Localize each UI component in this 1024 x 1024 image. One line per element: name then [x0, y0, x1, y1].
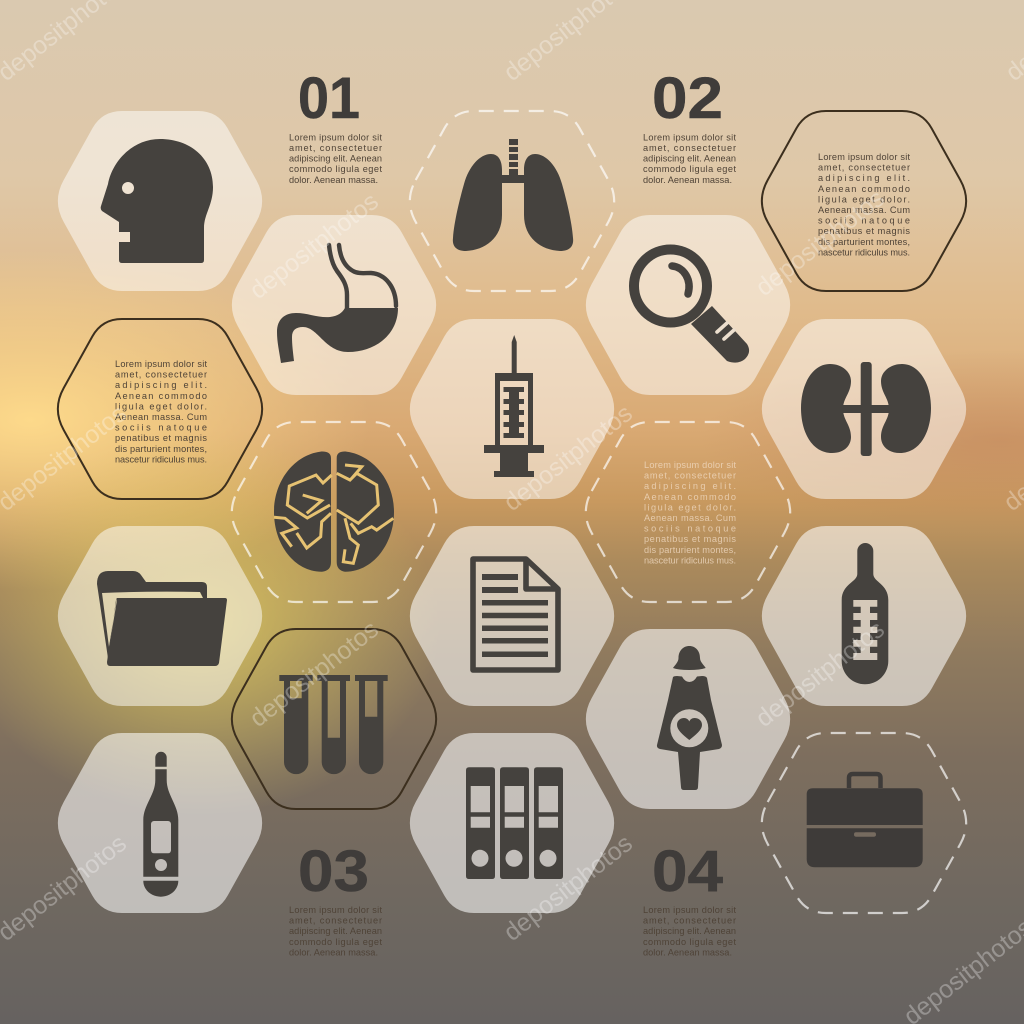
- dashed hexagon: text block: adipiscing elit.: [644, 481, 736, 491]
- section 02: number and text: amet, consectetuer: [643, 143, 736, 153]
- dashed hexagon: briefcase icon: [762, 733, 966, 913]
- dashed hexagon: text block: amet, consectetuer: [644, 471, 736, 481]
- dashed hexagon: text block: [586, 422, 790, 602]
- dashed hexagon: text block: ligula eget dolor.: [644, 502, 736, 512]
- outline hexagon: text block: Aenean massa. Cum: [818, 205, 910, 215]
- outline hexagon: text block: Aenean commodo: [115, 391, 207, 401]
- section 03: number and text: dolor. Aenean massa.: [289, 947, 378, 957]
- outline hexagon: text block: sociis natoque: [818, 216, 910, 226]
- dashed hexagon: text block: Lorem ipsum dolor sit: [644, 460, 736, 470]
- watermarks: depositphotos: [750, 184, 890, 302]
- section 02: number and text: [643, 66, 736, 185]
- hexagon: folder icon: [58, 526, 262, 706]
- outline hexagon: text block: adipiscing elit.: [818, 173, 910, 183]
- dashed hexagon: text block: sociis natoque: [644, 524, 736, 534]
- outline hexagon: text block: amet, consectetuer: [818, 163, 910, 173]
- watermarks: depositphotos: [244, 615, 384, 733]
- dashed hexagon: text block: dis parturient montes,: [644, 545, 736, 555]
- section 04: number and text: dolor. Aenean massa.: [643, 947, 732, 957]
- outline hexagon: text block: amet, consectetuer: [115, 370, 207, 380]
- section 03: number and text: 03: [298, 839, 369, 904]
- hexagon: document icon: [410, 526, 614, 706]
- section 04: number and text: 04: [652, 839, 723, 904]
- hexagon: stomach icon: [232, 215, 436, 395]
- section 02: number and text: adipiscing elit. Aenean: [643, 154, 736, 164]
- outline hexagon: text block: dis parturient montes,: [818, 237, 910, 247]
- outline hexagon: text block: [762, 111, 966, 291]
- outline hexagon: text block: [58, 319, 262, 499]
- outline hexagon: text block: penatibus et magnis: [818, 226, 910, 236]
- outline hexagon: text block: ligula eget dolor.: [115, 401, 207, 411]
- hexagon: digital thermometer icon: [58, 733, 262, 913]
- hexagon: magnifying glass icon: [586, 215, 790, 395]
- section 04: number and text: [643, 839, 736, 957]
- section 04: number and text: adipiscing elit. Aenean: [643, 926, 736, 936]
- section 03: number and text: [289, 839, 382, 957]
- dashed hexagon: brain icon: [232, 422, 436, 602]
- outline hexagon: text block: penatibus et magnis: [115, 433, 207, 443]
- watermarks: depositphotos: [498, 829, 638, 947]
- outline hexagon: text block: nascetur ridiculus mus.: [818, 247, 910, 257]
- outline hexagon: text block: ligula eget dolor.: [818, 194, 910, 204]
- section 02: number and text: commodo ligula eget: [643, 164, 736, 174]
- section 03: number and text: commodo ligula eget: [289, 937, 382, 947]
- dashed hexagon: text block: Aenean commodo: [644, 492, 736, 502]
- watermarks: depositphotos: [244, 187, 384, 305]
- section 01: number and text: amet, consectetuer: [289, 143, 382, 153]
- outline hexagon: test tubes icon: [232, 629, 436, 809]
- section 04: number and text: commodo ligula eget: [643, 937, 736, 947]
- section 02: number and text: 02: [652, 66, 723, 131]
- hexagon: syringe icon: [410, 319, 614, 499]
- hexagon: binders icon: [410, 733, 614, 913]
- outline hexagon: text block: dis parturient montes,: [115, 444, 207, 454]
- section 02: number and text: Lorem ipsum dolor sit: [643, 132, 736, 142]
- hexagon: pregnant woman icon: [586, 629, 790, 809]
- outline hexagon: text block: Lorem ipsum dolor sit: [818, 152, 910, 162]
- watermarks: depositphotos: [498, 399, 638, 517]
- dashed hexagon: text block: penatibus et magnis: [644, 534, 736, 544]
- hexagon: kidneys icon: [762, 319, 966, 499]
- section 01: number and text: commodo ligula eget: [289, 164, 382, 174]
- section 01: number and text: [289, 66, 382, 185]
- section 01: number and text: dolor. Aenean massa.: [289, 175, 378, 185]
- outline hexagon: text block: adipiscing elit.: [115, 380, 207, 390]
- hexagon: bottle thermometer icon: [762, 526, 966, 706]
- section 03: number and text: Lorem ipsum dolor sit: [289, 905, 382, 915]
- section 02: number and text: dolor. Aenean massa.: [643, 175, 732, 185]
- dashed hexagon: text block: nascetur ridiculus mus.: [644, 555, 736, 565]
- section 01: number and text: 01: [298, 66, 360, 131]
- dashed hexagon: text block: Aenean massa. Cum: [644, 513, 736, 523]
- outline hexagon: text block: sociis natoque: [115, 423, 207, 433]
- outline hexagon: text block: nascetur ridiculus mus.: [115, 454, 207, 464]
- section 04: number and text: amet, consectetuer: [643, 916, 736, 926]
- section 01: number and text: adipiscing elit. Aenean: [289, 154, 382, 164]
- hexagon: head icon: [58, 111, 262, 291]
- outline hexagon: text block: Aenean commodo: [818, 184, 910, 194]
- section 01: number and text: Lorem ipsum dolor sit: [289, 132, 382, 142]
- section 03: number and text: amet, consectetuer: [289, 916, 382, 926]
- watermarks: depositphotos: [750, 615, 890, 733]
- outline hexagon: text block: Lorem ipsum dolor sit: [115, 359, 207, 369]
- section 04: number and text: Lorem ipsum dolor sit: [643, 905, 736, 915]
- outline hexagon: text block: Aenean massa. Cum: [115, 412, 207, 422]
- section 03: number and text: adipiscing elit. Aenean: [289, 926, 382, 936]
- dashed hexagon: lungs icon: [410, 111, 614, 291]
